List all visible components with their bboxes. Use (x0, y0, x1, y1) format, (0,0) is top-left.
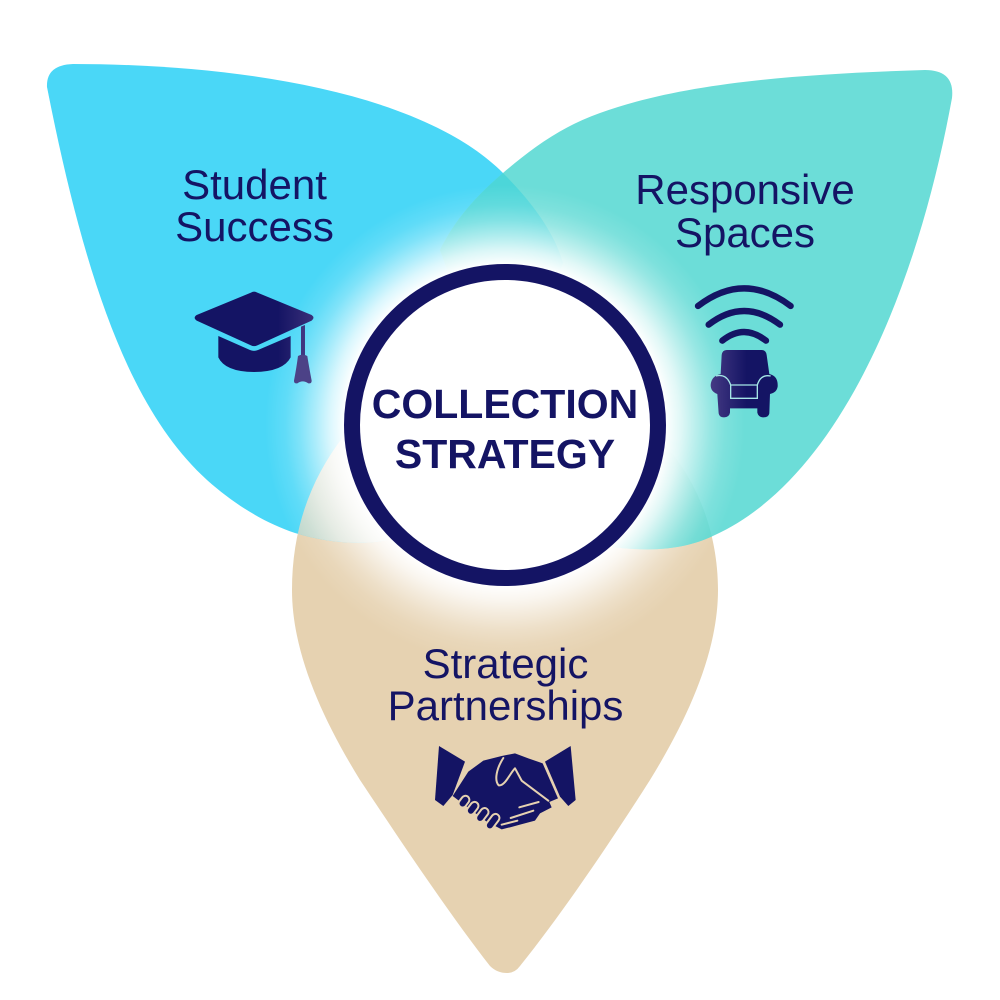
heading: student success: Student (182, 161, 327, 208)
icon: armchair with wifi signal (698, 288, 791, 417)
heading: student success: Success (175, 203, 334, 250)
heading: responsive spaces: Responsive (635, 166, 855, 213)
overlap: responsive spaces and partnerships (638, 509, 712, 550)
white centre glow (265, 185, 745, 665)
overlap: student success and responsive spaces (440, 173, 560, 257)
centre title: COLLECTION (372, 381, 638, 427)
centre title: STRATEGY (395, 431, 615, 477)
heading: strategic partnerships: Strategic (423, 640, 588, 687)
petal: strategic partnerships (292, 425, 718, 973)
icon: graduation cap (195, 292, 313, 383)
heading: strategic partnerships: Partnerships (388, 682, 623, 729)
petal: responsive spaces (440, 70, 952, 549)
petal: student success (47, 64, 563, 543)
centre circle (352, 272, 658, 578)
heading: responsive spaces: Spaces (675, 209, 815, 256)
overlap: student success and partnerships (298, 440, 387, 543)
icon: handshake (435, 746, 576, 831)
